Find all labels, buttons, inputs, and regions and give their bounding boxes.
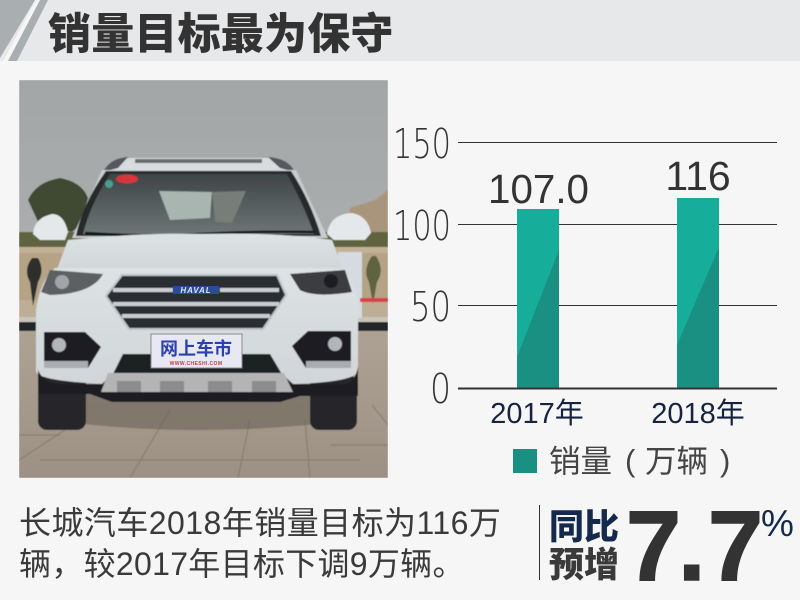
bar 2017 [517,209,559,389]
x axis [458,388,777,390]
HAVAL badge [173,286,219,294]
mirrors [33,214,68,240]
skid plate [101,373,293,392]
growth callout [549,490,794,600]
y axis labels: 50 [410,283,451,331]
hood [56,234,344,272]
y axis labels [393,120,451,413]
value label 2018: 116 [665,153,731,199]
legend [513,436,730,482]
value label 2017: 107.0 [488,166,589,212]
fog lights [44,331,351,368]
percent sign: % [761,503,794,544]
body side pillars [72,170,328,238]
grille [106,275,286,329]
description text: 辆，较2017年目标下调9万辆。 [19,546,465,582]
roof and rails [111,158,287,170]
windshield [76,171,321,236]
y axis labels: 150 [393,120,451,168]
bumper [37,367,359,389]
category label 2017: 2017年 [490,397,584,430]
front fascia [36,268,358,384]
divider [538,505,540,580]
photo: white SUV front view [19,80,388,478]
gridlines [458,142,777,306]
callout label line 2: 预增 [549,537,619,588]
legend: 销量 [549,436,612,482]
header banner [0,0,800,62]
headlights [41,270,103,295]
background trees and balustrade [19,178,388,331]
pavement [19,331,388,478]
HAVAL badge: HAVAL [180,286,212,295]
legend: ( [625,443,636,478]
category label 2018: 2018年 [651,397,745,430]
licence plate: 网上车市 [160,335,232,361]
A10 sticker [105,174,138,188]
title: 销量目标最为保守 [48,0,394,62]
description text [19,505,501,582]
licence plate [151,334,242,368]
tyres [38,375,357,430]
legend: ) [720,443,730,478]
y axis labels: 100 [393,202,451,250]
header slashes [0,0,48,61]
big number: 7.7 [626,490,763,600]
description text: 长城汽车2018年销量目标为116万 [19,505,501,541]
y axis labels: 0 [430,365,451,413]
lower intake [112,354,283,376]
licence plate: WWW.CHESHI.COM [170,361,222,367]
callout label line 1: 同比 [549,499,619,550]
bar 2018 [677,198,719,389]
legend: 万辆 [645,436,708,482]
bar chart [393,120,777,482]
